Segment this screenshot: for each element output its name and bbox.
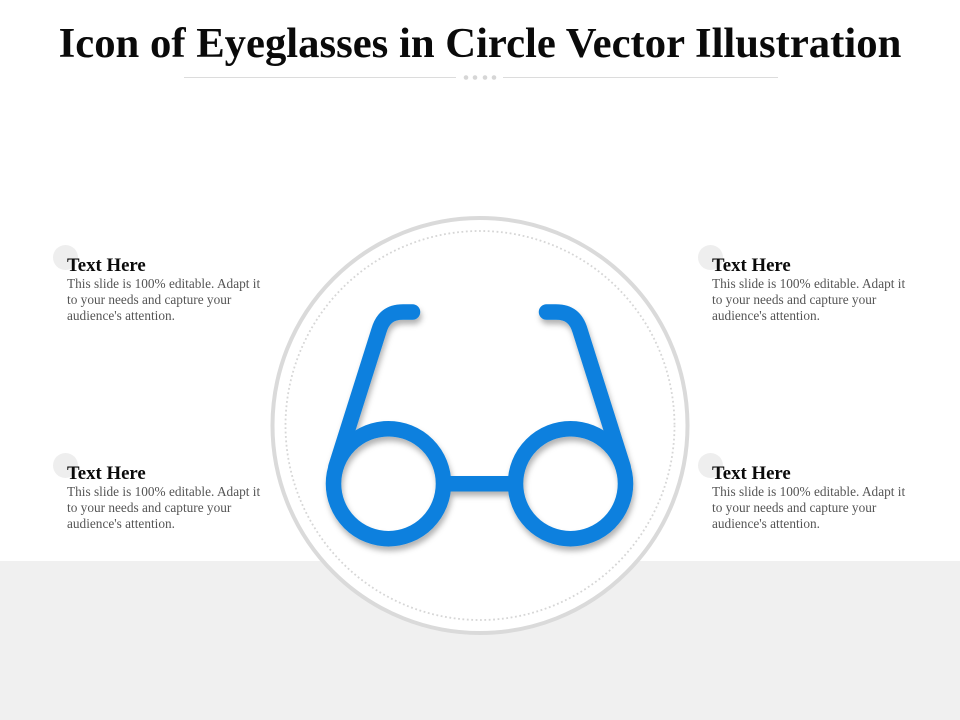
body text: This slide is 100% editable. Adapt it: [67, 276, 260, 291]
body text: [67, 484, 260, 531]
text block: bottom left: [53, 453, 260, 531]
heading: Text Here: [712, 463, 791, 484]
body text: This slide is 100% editable. Adapt it: [712, 484, 905, 499]
body text: [712, 484, 906, 531]
icon: eyeglasses: [334, 312, 626, 539]
dotted inner ring: [286, 231, 674, 620]
bullet dot: [53, 453, 78, 478]
body text: to your needs and capture your: [67, 292, 231, 307]
bullet dot: [698, 453, 723, 478]
body text: This slide is 100% editable. Adapt it: [67, 484, 260, 499]
text block: top right: [698, 245, 906, 323]
body text: to your needs and capture your: [67, 500, 231, 515]
body text: [712, 276, 906, 323]
body text: to your needs and capture your: [712, 292, 876, 307]
heading: Text Here: [67, 255, 146, 276]
heading: Text Here: [67, 463, 146, 484]
body text: audience's attention.: [67, 516, 175, 531]
text block: bottom right: [698, 453, 906, 531]
bullet dot: [698, 245, 723, 270]
body text: [67, 276, 260, 323]
outer ring: [272, 218, 688, 633]
title divider: [184, 75, 778, 80]
body text: audience's attention.: [712, 516, 820, 531]
title: Icon of Eyeglasses in Circle Vector Illustration: [59, 20, 901, 67]
text block: top left: [53, 245, 260, 323]
body text: audience's attention.: [67, 308, 175, 323]
body text: audience's attention.: [712, 308, 820, 323]
body text: This slide is 100% editable. Adapt it: [712, 276, 905, 291]
body text: to your needs and capture your: [712, 500, 876, 515]
bottom grey band: [0, 561, 960, 720]
heading: Text Here: [712, 255, 791, 276]
central circle with eyeglasses icon: [270, 216, 690, 635]
bullet dot: [53, 245, 78, 270]
